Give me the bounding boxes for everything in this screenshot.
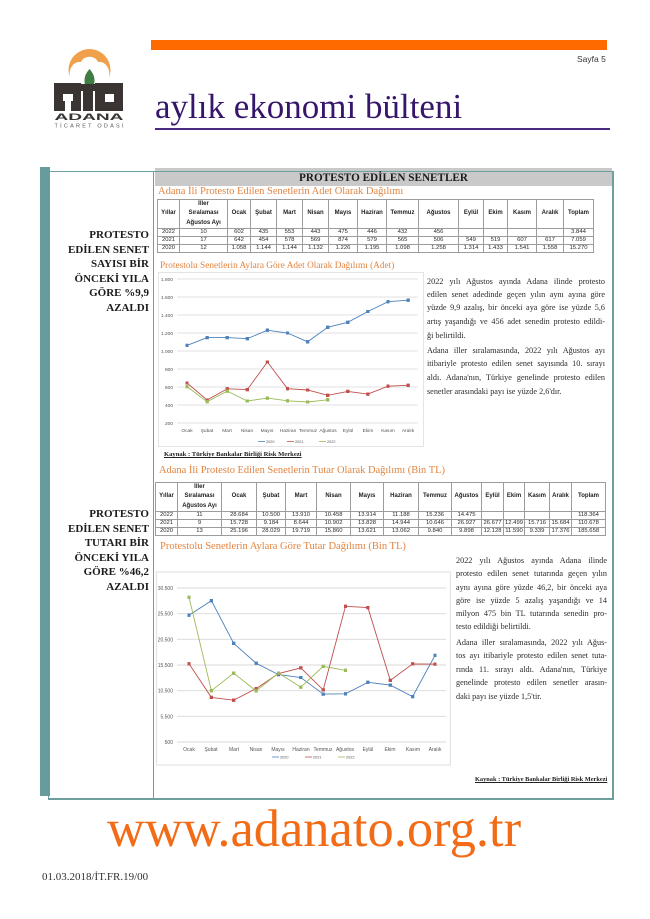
table: protested bills count: 519 (491, 237, 500, 243)
heading: amount chart title: Protestolu Senetlerin Aylara Göre Tutar Dağılımı (Bin TL) (160, 541, 406, 552)
side callout: count: GÖRE %9,9 (89, 287, 149, 299)
table: protested bills amount: Haziran (390, 493, 412, 499)
text: 2022 yılı Ağustos ayında Adana ilinde (456, 556, 607, 565)
line chart: monthly amount: Kasım (406, 747, 420, 753)
table: protested bills count: 475 (338, 229, 348, 235)
table: protested bills amount: 14.944 (392, 520, 410, 526)
text: aldı. Adana'nın, Türkiye genelinde protesto edilen (427, 373, 605, 382)
table: protested bills amount: 10.646 (426, 520, 444, 526)
table: protested bills count: Haziran (361, 210, 383, 216)
line chart: monthly count: 2022 (327, 440, 335, 444)
line chart: monthly amount: Eylül (363, 747, 373, 753)
table: protested bills count: 506 (434, 237, 443, 243)
line chart: monthly amount: Mayıs (271, 747, 285, 753)
table: protested bills count: Mayıs (335, 210, 351, 216)
table: protested bills amount: 2020 (160, 528, 173, 534)
table: protested bills count: 15.270 (569, 245, 588, 251)
table: protested bills count: 1.098 (395, 245, 410, 251)
table: protested bills count: 10 (200, 229, 207, 235)
table: protested bills count: Nisan (307, 210, 324, 216)
table: protested bills count: 3.844 (571, 229, 586, 235)
table: protested bills count: 617 (545, 237, 555, 243)
table: protested bills amount: 26.677 (483, 520, 502, 526)
text: Adana iller sıralamasında, 2022 yılı Ağustos ayı (427, 346, 605, 355)
table: protested bills amount: 28.029 (262, 528, 280, 534)
table: protested bills count: 549 (466, 237, 476, 243)
table: protested bills amount: 10.500 (262, 512, 280, 518)
table: protested bills count: 432 (398, 229, 407, 235)
table: protested bills amount: 11 (196, 512, 203, 518)
table: protested bills count: 1.558 (543, 245, 557, 251)
table: protested bills count: 874 (338, 237, 348, 243)
text: itibariyle protesto edilen senet sayısında 10. sırayı (427, 359, 605, 368)
table: protested bills amount: 15.236 (426, 512, 444, 518)
table: protested bills count (157, 199, 594, 253)
line chart: monthly count: Mart (222, 428, 232, 434)
table: protested bills amount: 2022 (160, 512, 173, 518)
line chart: monthly count: Mayıs (261, 428, 274, 434)
website address: www.adanato.org.tr (107, 800, 521, 858)
line chart: monthly count: Haziran (280, 428, 297, 434)
table: protested bills count: Aralık (542, 210, 558, 216)
table: protested bills count: Toplam (568, 210, 589, 216)
table: protested bills amount: Ocak (232, 493, 246, 499)
table: protested bills amount: Sıralaması (184, 493, 215, 499)
line chart: monthly count: Ocak (181, 428, 193, 434)
table: protested bills count: 443 (311, 229, 320, 235)
table: protested bills amount: 2021 (160, 520, 173, 526)
text: ği belirtildi. (427, 331, 466, 340)
line chart: monthly count: 800 (165, 367, 173, 373)
line chart: monthly count: 400 (165, 403, 173, 409)
table: protested bills count: 7.059 (571, 237, 586, 243)
line chart: monthly amount: 2022 (346, 756, 354, 760)
side callout: count: EDİLEN SENET (68, 244, 149, 256)
orange header bar (151, 40, 607, 50)
table: protested bills amount: Kasım (528, 493, 546, 499)
side callout: amount (68, 508, 150, 593)
line chart: monthly amount: 25.500 (158, 612, 173, 618)
line chart: monthly amount: 15.500 (158, 663, 173, 669)
table: protested bills amount: İller (194, 484, 205, 490)
table: protested bills count: 2020 (162, 245, 175, 251)
table: protested bills count: 1.541 (515, 245, 529, 251)
panel: left teal bar (40, 167, 50, 796)
table: protested bills amount: Şubat (263, 493, 279, 499)
table: protested bills count: 602 (234, 229, 244, 235)
table: protested bills amount: Ağustos (454, 493, 478, 499)
table: protested bills amount: 110.678 (578, 520, 599, 526)
table: protested bills count: 578 (285, 237, 294, 243)
text: testo edildiği belirtildi. (456, 622, 531, 631)
table: protested bills count: İller (198, 201, 209, 207)
source note: amount: Kaynak : Türkiye Bankalar Birliği Risk Merkezi (475, 776, 607, 783)
table: protested bills amount: 11.590 (505, 528, 523, 534)
table: protested bills amount: 26.927 (457, 520, 476, 526)
table: protested bills count: Ağustos (426, 210, 450, 216)
table: protested bills count: 1.132 (308, 245, 323, 251)
line chart: monthly count: Aralık (402, 428, 415, 434)
text: protesto edilen senet tutarında geçen yılın (456, 569, 607, 578)
table: protested bills count: Yıllar (161, 210, 176, 216)
icon: Adana Ticaret Odası logo: ADANA (54, 112, 124, 123)
table: protested bills amount: 12.499 (505, 520, 523, 526)
line chart: monthly count: 2021 (295, 440, 303, 444)
table: protested bills count: 565 (398, 237, 407, 243)
table: protested bills count: 553 (285, 229, 294, 235)
table: protested bills count: 2022 (162, 229, 175, 235)
text: Adana iller sıralamasında, 2022 yılı Ağus- (456, 638, 607, 647)
page number: Sayfa 5 (577, 54, 606, 64)
text: artış yaşandığı ve 456 adet senedin protesto edildi- (427, 317, 605, 326)
table: protested bills amount: 19.719 (292, 528, 310, 534)
line chart: monthly count: 600 (165, 385, 173, 391)
table: protested bills count: 454 (259, 237, 268, 243)
table: protested bills amount: Eylül (485, 493, 500, 499)
text: genelinde protesto edilen senetler arasın- (456, 678, 607, 687)
form code footer: 01.03.2018/İT.FR.19/00 (42, 871, 148, 883)
side callout: amount: PROTESTO (89, 508, 149, 520)
line chart: monthly amount: Haziran (292, 747, 310, 753)
table: protested bills amount: 12.128 (483, 528, 502, 534)
table: protested bills amount: 15.684 (551, 520, 570, 526)
table: protested bills count: 1.433 (488, 245, 503, 251)
table: protested bills amount: 13.910 (292, 512, 310, 518)
side callout: count: SAYISI BİR (91, 258, 149, 270)
table: protested bills amount: 11.188 (392, 512, 410, 518)
heading: count chart title: Protestolu Senetlerin Aylara Göre Adet Olarak Dağılımı (Adet) (160, 261, 394, 271)
table: protested bills amount: Ağustos Ayı (182, 503, 217, 509)
table: protested bills amount: 9.339 (530, 528, 544, 534)
line chart: monthly amount: 30.500 (158, 586, 173, 592)
table: protested bills amount: 13.914 (358, 512, 376, 518)
text: daki payı ise yüzde 1,5'tir. (456, 692, 542, 701)
table: protested bills count: 607 (517, 237, 527, 243)
table: protested bills amount: 10.458 (324, 512, 343, 518)
side callout: amount: ÖNCEKİ YILA (75, 552, 149, 564)
icon: Adana Ticaret Odası logo (54, 49, 124, 130)
text block: count commentary (427, 277, 605, 396)
line chart: monthly amount: 20.500 (158, 637, 173, 643)
line chart: monthly count: Eylül (343, 428, 353, 434)
table: protested bills count: 1.144 (282, 245, 297, 251)
table: protested bills amount: 9.840 (428, 528, 442, 534)
text: yüzde 9,9 azalış, bir önceki aya göre ise yüzde 5,6 (427, 303, 605, 312)
table: protested bills amount: Yıllar (159, 493, 174, 499)
heading: count table title: Adana İli Protesto Edilen Senetlerin Adet Olarak Dağılımı (158, 186, 403, 197)
side callout: amount: EDİLEN SENET (68, 523, 149, 535)
line chart: monthly amount: Ekim (384, 747, 396, 753)
table: protested bills amount: 15.728 (230, 520, 248, 526)
table: protested bills amount: 25.196 (230, 528, 248, 534)
table: protested bills count: 1.258 (431, 245, 446, 251)
line chart: monthly amount: 10.500 (158, 689, 173, 695)
table: protested bills count: Temmuz (391, 210, 414, 216)
text: tos ayı itibariyle protesto edilen senet tuta- (456, 651, 607, 660)
table: protested bills count: 1.195 (365, 245, 379, 251)
table: protested bills amount: 8.644 (294, 520, 308, 526)
text: rında 11. sırayı aldı. Adana'nın, Türkiye (456, 665, 607, 674)
line chart: monthly count: 1.800 (161, 277, 173, 283)
table: protested bills count: 1.144 (256, 245, 271, 251)
text: milyon 475 bin TL tutarında senedin pro- (456, 609, 607, 618)
table: protested bills amount: 14.475 (457, 512, 476, 518)
table: protested bills amount: 28.684 (230, 512, 248, 518)
table: protested bills count: Eylül (464, 210, 478, 216)
line chart: monthly count (158, 272, 424, 447)
table: protested bills count: Kasım (513, 210, 531, 216)
table: protested bills count: 642 (234, 237, 244, 243)
table: protested bills amount: 13.062 (392, 528, 410, 534)
source note: count: Kaynak : Türkiye Bankalar Birliği Risk Merkezi (164, 451, 302, 458)
side callout: count: ÖNCEKİ YILA (75, 273, 149, 285)
line chart: monthly amount: 2020 (280, 756, 288, 760)
table: protested bills count: 435 (259, 229, 268, 235)
line chart: monthly count: 2020 (266, 440, 274, 444)
line chart: monthly count: 1.600 (161, 295, 173, 301)
table: protested bills count: 569 (311, 237, 320, 243)
line chart: monthly count: Şubat (201, 428, 214, 434)
title: aylık ekonomi bülteni (155, 87, 462, 126)
table: protested bills count: 456 (434, 229, 443, 235)
table: protested bills count: 2021 (162, 237, 175, 243)
side callout: amount: AZALDI (106, 581, 149, 593)
line chart: monthly count: 1.000 (161, 349, 173, 355)
line chart: monthly count: Nisan (241, 428, 253, 434)
line chart: monthly amount: 5.500 (160, 714, 173, 720)
line chart: monthly amount: Şubat (204, 747, 218, 753)
table: protested bills count: 446 (367, 229, 377, 235)
table: protested bills count: Şubat (255, 210, 272, 216)
text: aynı ayına göre yüzde 46,2, bir önceki aya (456, 583, 607, 592)
text: göre ise yüzde 5 azalış yaşandığı ve 14 (456, 596, 607, 605)
table: protested bills amount: 10.902 (324, 520, 343, 526)
heading: section title: PROTESTO EDİLEN SENETLER (299, 172, 468, 184)
table: protested bills amount: 185.658 (578, 528, 599, 534)
line chart: monthly count: Ekim (363, 428, 373, 434)
table: protested bills amount: Mayıs (359, 493, 375, 499)
table: protested bills amount: 13 (196, 528, 203, 534)
text block: amount commentary (456, 556, 607, 701)
line chart: monthly count: 1.200 (161, 331, 173, 337)
table: protested bills amount: Nisan (325, 493, 342, 499)
line chart: monthly count: Ağustos (319, 428, 337, 434)
line chart: monthly amount: Ocak (183, 747, 195, 753)
title underline (155, 128, 610, 130)
line chart: monthly amount: 2021 (313, 756, 321, 760)
line chart: monthly amount: Aralık (429, 747, 442, 753)
table: protested bills amount: 9.898 (459, 528, 474, 534)
heading: amount table title: Adana İli Protesto Edilen Senetlerin Tutar Olarak Dağılımı (Bin TL) (159, 465, 445, 476)
table: protested bills amount: 13.828 (358, 520, 376, 526)
table: protested bills amount: Temmuz (423, 493, 447, 499)
line chart: monthly count: 200 (165, 421, 173, 427)
line chart: monthly count: Kasım (381, 428, 395, 434)
side callout: count: AZALDI (106, 302, 149, 314)
line chart: monthly amount: Nisan (250, 747, 263, 753)
table: protested bills count: Ağustos Ayı (186, 220, 221, 226)
line chart: monthly count: Temmuz (299, 428, 318, 434)
table: protested bills amount: Aralık (552, 493, 569, 499)
line chart: monthly amount: Ağustos (336, 747, 355, 753)
table: protested bills amount: 13.621 (358, 528, 376, 534)
table: protested bills amount: 15.860 (324, 528, 343, 534)
table: protested bills count: Mart (283, 210, 296, 216)
table: protested bills amount: Mart (295, 493, 307, 499)
side callout: count (68, 229, 150, 314)
table: protested bills amount: 15.716 (528, 520, 546, 526)
side callout: count: PROTESTO (89, 229, 149, 241)
table: protested bills count: 1.226 (336, 245, 350, 251)
table: protested bills amount: 9 (198, 520, 201, 526)
table: protested bills count: 17 (200, 237, 207, 243)
table: protested bills count: 1.058 (232, 245, 246, 251)
table: protested bills count: 1.314 (464, 245, 478, 251)
table: protested bills amount: 118.364 (578, 512, 599, 518)
line chart: monthly amount: Temmuz (314, 747, 333, 753)
column divider (152, 172, 154, 798)
table: protested bills amount: 9.184 (264, 520, 278, 526)
side callout: amount: TUTARI BİR (85, 537, 149, 549)
text: senetler arasındaki payı ise yüzde 2,6'dır. (427, 387, 561, 396)
text: 2022 yılı Ağustos ayında Adana ilinde protesto (427, 277, 605, 286)
line chart: monthly amount: Mart (229, 747, 240, 753)
table: protested bills count: Ocak (232, 210, 246, 216)
table: protested bills count: Sıralaması (188, 210, 219, 216)
side callout: amount: GÖRE %46,2 (84, 566, 149, 578)
table: protested bills amount: 17.376 (551, 528, 570, 534)
panel: section header band (155, 168, 612, 186)
line chart: monthly count: 1.400 (161, 313, 173, 319)
line chart: monthly amount: 500 (165, 740, 173, 746)
table: protested bills amount: Ekim (507, 493, 521, 499)
text: edilen senet adedinde geçen yılın aynı ayına göre (427, 290, 605, 299)
table: protested bills count: 579 (367, 237, 377, 243)
line chart: monthly amount (156, 572, 451, 766)
table: protested bills count: Ekim (488, 210, 503, 216)
table: protested bills amount: Toplam (578, 493, 599, 499)
table: protested bills count: 12 (200, 245, 207, 251)
panel: main frame (48, 171, 614, 800)
table: protested bills amount (155, 482, 606, 536)
icon: Adana Ticaret Odası logo: TİCARET ODASI (54, 122, 124, 130)
